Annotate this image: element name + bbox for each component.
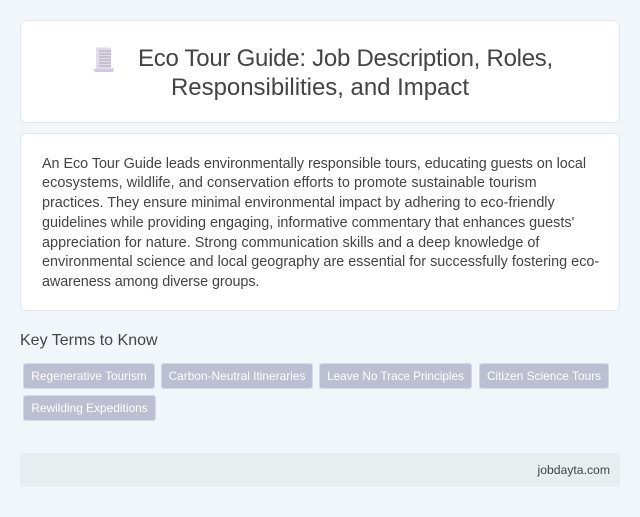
- description panel: practices. They ensure minimal environmental impact by adhering to eco-friendly: [42, 195, 555, 211]
- tag: Leave No Trace Principles: Leave No Trace Principles: [327, 369, 464, 383]
- tag: Rewilding Expeditions: Rewilding Expeditions: [31, 401, 148, 415]
- tag: Regenerative Tourism: [23, 363, 155, 389]
- description panel: ecosystems, wildlife, and conservation efforts to promote sustainable tourism: [42, 175, 537, 191]
- description panel: appreciation for nature. Strong communication skills and a deep knowledge of: [42, 235, 539, 251]
- tag: Carbon-Neutral Itineraries: [161, 363, 313, 389]
- description panel: environmental science and local geography are essential for successfully fostering eco-: [42, 254, 599, 270]
- key terms heading: Key Terms to Know: [20, 332, 158, 349]
- description text: An Eco Tour Guide leads environmentally responsible tours, educating guests on local: [42, 156, 586, 172]
- tag: Leave No Trace Principles: [319, 363, 472, 389]
- title card: [20, 20, 620, 123]
- tag: Citizen Science Tours: [479, 363, 609, 389]
- tag: Regenerative Tourism: Regenerative Tourism: [31, 369, 147, 383]
- tag: Carbon-Neutral Itineraries: Carbon-Neutral Itineraries: [169, 369, 305, 383]
- description panel: guidelines while providing engaging, informative commentary that enhances guests': [42, 215, 574, 231]
- description panel: [20, 133, 620, 311]
- description panel: awareness among diverse groups.: [42, 274, 259, 290]
- tag: Citizen Science Tours: Citizen Science Tours: [487, 369, 601, 383]
- footer source text: jobdayta.com: [538, 463, 610, 477]
- footer bar: [20, 453, 620, 487]
- heading: Eco Tour Guide: Job Description, Roles,: [138, 45, 553, 72]
- tag: Rewilding Expeditions: [23, 395, 156, 421]
- icon: document scroll: [93, 47, 114, 72]
- title card: Responsibilities, and Impact: [171, 74, 469, 101]
